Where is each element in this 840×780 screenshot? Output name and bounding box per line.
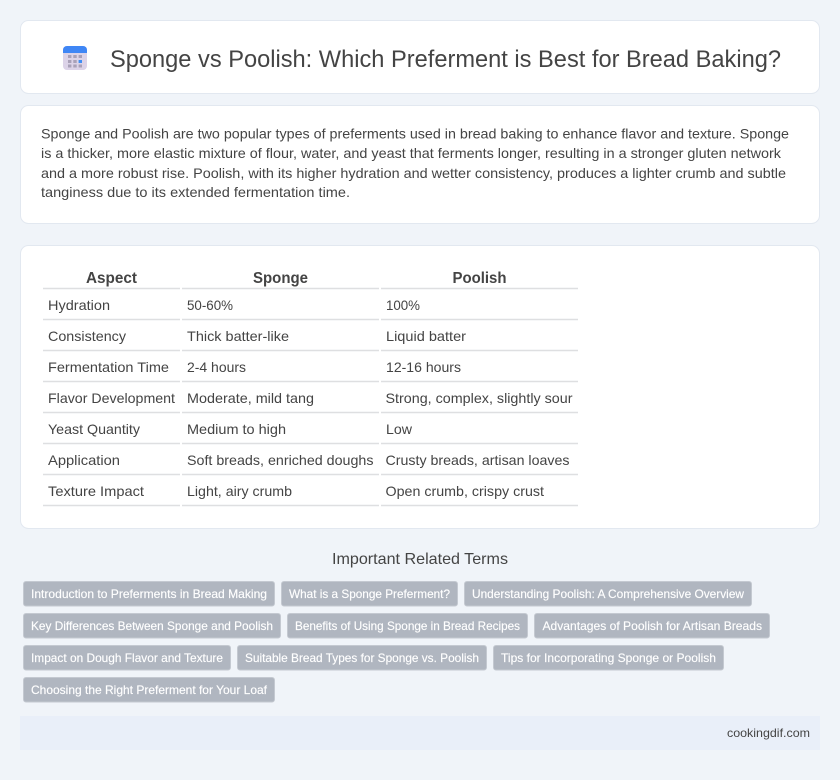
tag: Introduction to Preferments in Bread Making xyxy=(31,587,267,601)
text block: introduction paragraph: Sponge and Poolish are two popular types of preferments used in bread baking to enhance flavor and texture. Sponge xyxy=(41,126,789,142)
row: fermentation time xyxy=(43,359,578,382)
icon: calendar xyxy=(63,46,87,70)
tag xyxy=(24,678,274,702)
row: flavor development: Moderate, mild tang xyxy=(187,390,314,406)
tag xyxy=(24,614,280,638)
text block: introduction paragraph: and a more robust rise. Poolish, with its higher hydration and wetter consistency, produces a lighter crumb and subtle xyxy=(41,165,786,181)
row: texture impact: Light, airy crumb xyxy=(187,483,292,499)
row: yeast quantity: Low xyxy=(386,421,413,437)
footer xyxy=(20,716,820,750)
tag: Advantages of Poolish for Artisan Breads xyxy=(542,619,762,633)
tag: Choosing the Right Preferment for Your Loaf xyxy=(31,683,268,697)
row: flavor development xyxy=(43,390,578,412)
tag: Benefits of Using Sponge in Bread Recipes xyxy=(295,619,520,633)
row: texture impact: Texture Impact xyxy=(48,483,144,499)
tag xyxy=(494,646,724,670)
tag: Tips for Incorporating Sponge or Poolish xyxy=(501,651,716,665)
row: yeast quantity xyxy=(43,421,578,444)
tag: What is a Sponge Preferment? xyxy=(289,587,450,601)
table header row: Aspect xyxy=(86,270,138,287)
row: hydration xyxy=(43,297,578,320)
row: consistency: Thick batter-like xyxy=(187,328,289,344)
tag xyxy=(288,614,528,638)
row: application: Soft breads, enriched doughs xyxy=(187,452,374,468)
heading: important related terms: Important Related Terms xyxy=(332,551,508,568)
table header row: Sponge xyxy=(253,270,308,287)
row: hydration: 100% xyxy=(386,297,420,313)
tag: Understanding Poolish: A Comprehensive Overview xyxy=(472,587,744,601)
row: flavor development: Strong, complex, slightly sour xyxy=(386,390,573,406)
text block: introduction paragraph xyxy=(41,126,789,200)
tag: Key Differences Between Sponge and Poolish xyxy=(31,619,273,633)
row: application: Application xyxy=(48,452,120,468)
row: yeast quantity: Yeast Quantity xyxy=(48,421,140,437)
panel: introduction xyxy=(20,106,820,224)
table header row xyxy=(43,270,578,288)
row: consistency: Consistency xyxy=(48,328,126,344)
tag xyxy=(24,646,230,670)
row: consistency: Liquid batter xyxy=(386,328,466,344)
row: yeast quantity: Medium to high xyxy=(187,421,286,437)
tag: Impact on Dough Flavor and Texture xyxy=(31,651,223,665)
row: flavor development: Flavor Development xyxy=(48,390,175,406)
tag xyxy=(238,646,486,670)
panel: header xyxy=(20,20,820,94)
tag xyxy=(24,582,274,606)
row: hydration: 50-60% xyxy=(187,297,233,313)
tag xyxy=(464,582,752,606)
row: application: Crusty breads, artisan loaves xyxy=(386,452,570,468)
table header row: Poolish xyxy=(452,270,506,287)
text block: introduction paragraph: is a thicker, more elastic mixture of flour, water, and yeast that ferments longer, resulting in a stronger gluten network xyxy=(41,145,782,161)
row: fermentation time: 2-4 hours xyxy=(187,359,246,375)
tag xyxy=(282,582,458,606)
panel: comparison table xyxy=(20,246,820,528)
row: consistency xyxy=(43,328,578,350)
title: Sponge vs Poolish: Which Preferment is Best for Bread Baking? xyxy=(110,46,781,73)
tag xyxy=(534,614,770,638)
row: hydration: Hydration xyxy=(48,297,110,313)
footer source text: cookingdif.com xyxy=(727,726,810,740)
row: application xyxy=(43,452,578,474)
row: texture impact xyxy=(43,483,578,506)
row: fermentation time: Fermentation Time xyxy=(48,359,169,375)
text block: introduction paragraph: tanginess due to its extended fermentation time. xyxy=(41,184,350,200)
tag: Suitable Bread Types for Sponge vs. Poolish xyxy=(245,651,479,665)
row: texture impact: Open crumb, crispy crust xyxy=(386,483,544,499)
related term tags xyxy=(24,582,770,702)
row: fermentation time: 12-16 hours xyxy=(386,359,461,375)
